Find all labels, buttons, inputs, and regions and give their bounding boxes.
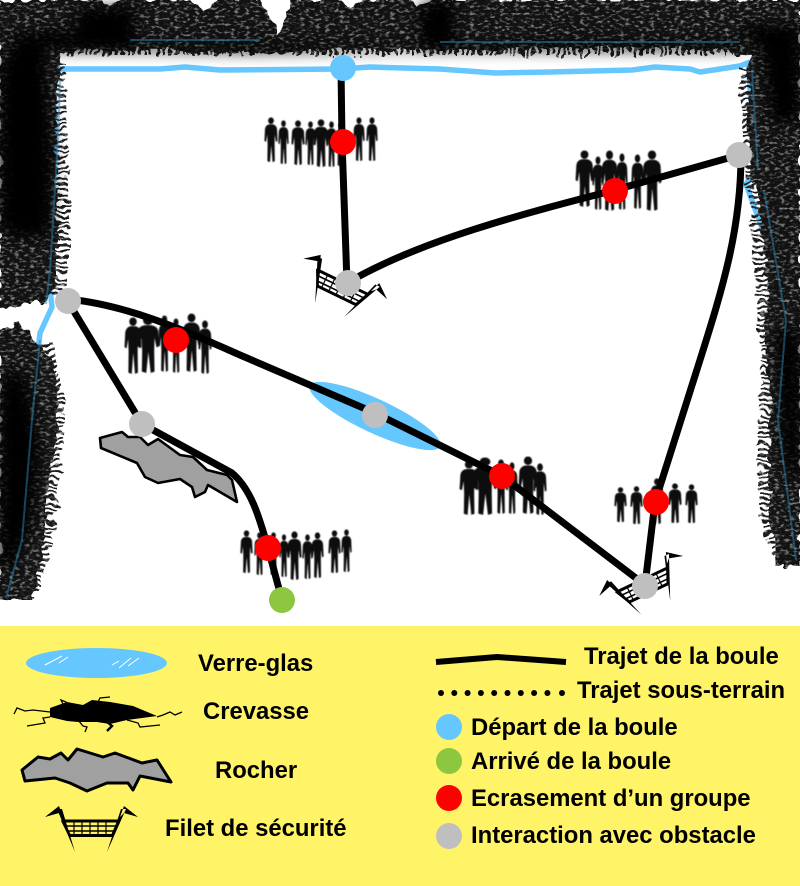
crowd 3 xyxy=(125,313,212,374)
crowd 6 xyxy=(240,529,352,580)
swatch: crash xyxy=(436,785,462,811)
swatch: arrival xyxy=(436,748,462,774)
icon: underground route dots xyxy=(438,690,565,696)
label: safety net: Filet de sécurité xyxy=(165,815,347,842)
blue water tint through the trees xyxy=(6,40,796,598)
map panel xyxy=(0,0,800,627)
swatch: obstacle xyxy=(436,823,462,849)
start point xyxy=(330,55,356,81)
label: start: Départ de la boule xyxy=(471,714,678,741)
obstacle interaction points xyxy=(55,142,752,599)
icon: safety net xyxy=(45,806,138,852)
label: route: Trajet de la boule xyxy=(584,643,779,670)
ice patch on the route xyxy=(303,370,447,462)
crash points xyxy=(163,129,669,561)
label: arrival: Arrivé de la boule xyxy=(471,748,671,775)
icon: route line xyxy=(436,657,566,662)
icon: rock xyxy=(22,749,171,791)
ball route xyxy=(67,68,741,600)
label: ice: Verre-glas xyxy=(198,650,313,677)
crowd 1 xyxy=(264,117,378,167)
crowd 5 xyxy=(614,478,698,524)
label: underground route: Trajet sous-terrain xyxy=(577,677,785,704)
label: rock: Rocher xyxy=(215,757,297,784)
frozen lake outline xyxy=(5,40,797,600)
safety net lower xyxy=(594,546,698,627)
fir trees border xyxy=(0,0,800,600)
safety net upper xyxy=(288,249,392,331)
crowd 2 xyxy=(576,150,661,211)
crowd 4 xyxy=(460,456,547,515)
legend panel xyxy=(0,626,800,886)
label: crevasse: Crevasse xyxy=(203,698,309,725)
label: crash: Ecrasement d’un groupe xyxy=(471,785,751,812)
label: obstacle: Interaction avec obstacle xyxy=(471,822,756,849)
swatch: start xyxy=(436,714,462,740)
icon: crevasse xyxy=(14,697,182,732)
arrival point xyxy=(269,587,295,613)
icon: ice xyxy=(26,648,167,678)
legend background xyxy=(0,626,800,886)
rock obstacle xyxy=(100,432,237,502)
